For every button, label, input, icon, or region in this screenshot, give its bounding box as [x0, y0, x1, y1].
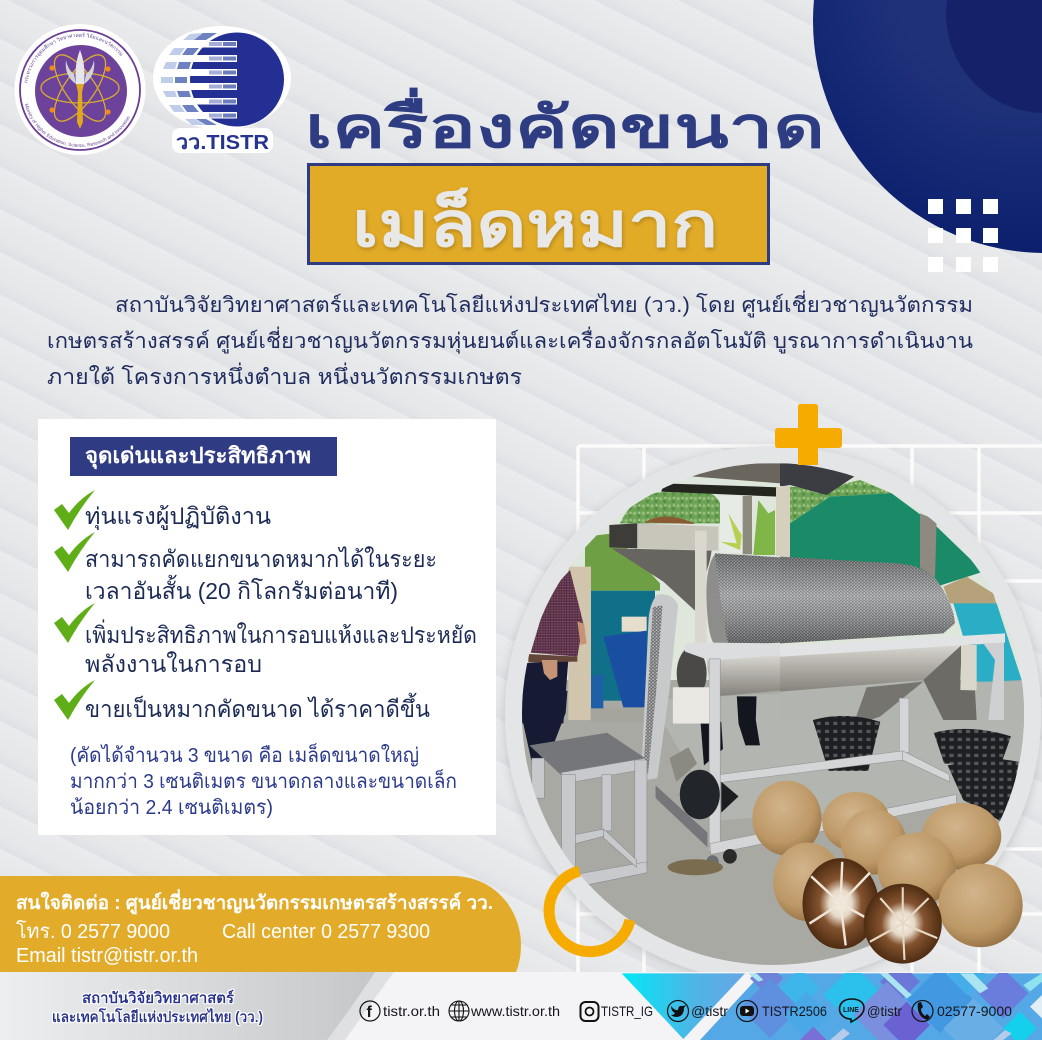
tree trunk [920, 513, 937, 577]
panel: contact [0, 876, 521, 972]
lower chute [855, 682, 923, 720]
facebook: f [366, 1004, 372, 1021]
floor right [780, 682, 992, 693]
benefit list: พลังงานในการอบ [85, 651, 262, 677]
panel: contact: โทร. 0 2577 9000 [16, 920, 170, 943]
trough right [780, 645, 962, 692]
intro paragraph [47, 290, 973, 389]
instagram [580, 1002, 653, 1021]
drum end [706, 554, 730, 645]
frame corner [685, 643, 780, 661]
panel: contact: สนใจติดต่อ : ศูนย์เชี่ยวชาญนวัตกรรมเกษตรสร้างสรรค์ วว. [16, 889, 493, 915]
pale support [961, 645, 977, 690]
photo: upper right scene [780, 463, 1040, 720]
building and pole [720, 496, 775, 555]
benefit list [85, 503, 477, 722]
size note: มากกว่า 3 เซนติเมตร ขนาดกลางและขนาดเล็ก [70, 768, 457, 793]
subtitle banner: เมล็ดหมาก: เมล็ดหมาก [352, 187, 718, 260]
photo ring [505, 446, 1041, 982]
teal wall [585, 591, 655, 710]
line: @tistr [867, 1003, 902, 1019]
trough left [707, 655, 780, 696]
icon: yellow open ring [549, 871, 630, 952]
social links [360, 999, 1012, 1022]
silver frame lower [709, 659, 956, 854]
phone [912, 1000, 1012, 1022]
icons: green check marks [54, 490, 95, 720]
goods on shelf [943, 577, 997, 605]
discharge chute [923, 645, 977, 720]
panel: contact: Call center 0 2577 9300 [222, 921, 430, 943]
panel: contact: Email tistr@tistr.or.th [16, 945, 198, 967]
cut nut right [864, 884, 942, 964]
benefit list: สามารถคัดแยกขนาดหมากได้ในระยะ [85, 546, 437, 572]
panel: highlights and efficiency [38, 419, 496, 835]
lower foliage [585, 533, 660, 591]
logo: ministry seal: กระทรวงการอุดมศึกษา วิทยาศาสตร์ วิจัยและนวัตกรรม [24, 32, 123, 83]
panel heading: จุดเด่นและประสิทธิภาพ [85, 443, 311, 470]
size note: น้อยกว่า 2.4 เซนติเมตร) [70, 797, 273, 819]
footer organisation name: และเทคโนโลยีแห่งประเทศไทย (วว.) [52, 1007, 263, 1026]
teal wall right [953, 603, 1022, 683]
benefit list: ทุ่นแรงผู้ปฏิบัติงาน [85, 503, 271, 530]
cut nut left [802, 858, 879, 949]
facebook [360, 1001, 440, 1021]
sky trees [789, 480, 892, 523]
benefit list: เวลาอันสั้น (20 กิโลกรัมต่อนาที) [85, 575, 398, 604]
intro paragraph: เกษตรสร้างสรรค์ ศูนย์เชี่ยวชาญนวัตกรรมหุ่นยนต์และเครื่องจักรกลอัตโนมัติ บูรณาการดำเนินงาน [47, 326, 973, 354]
youtube: TISTR2506 [762, 1003, 827, 1019]
intro paragraph: สถาบันวิจัยวิทยาศาสตร์และเทคโนโลยีแห่งประเทศไทย (วว.) โดย ศูนย์เชี่ยวชาญนวัตกรรม [115, 290, 973, 318]
concrete floor strip [590, 708, 604, 720]
decorative navy circles top right [813, 0, 1042, 253]
roof [661, 463, 781, 556]
twitter [668, 1000, 728, 1022]
logo: ministry seal [14, 24, 146, 155]
photo: areca nut sorting machine [522, 463, 1024, 965]
perforated drum left [715, 553, 780, 645]
logo: ministry seal: Ministry of Higher Education, Science, Research and Innovation [24, 104, 130, 148]
decorative white grid behind photo [578, 446, 1042, 975]
logo: TISTR [153, 26, 291, 154]
wheel hub [676, 650, 707, 688]
instagram: TISTR_IG [601, 1003, 653, 1019]
logo: TISTR: วว.TISTR [176, 132, 270, 154]
trees [620, 492, 725, 523]
roof [780, 463, 857, 495]
phone: 02577-9000 [937, 1003, 1012, 1019]
size note [70, 742, 457, 819]
step stool [529, 733, 647, 885]
icon: white dot grid [928, 199, 998, 272]
intro paragraph: ภายใต้ โครงการหนึ่งตำบล หนึ่งนวัตกรรมเกษตร [47, 362, 522, 389]
benefit list: ขายเป็นหมากคัดขนาด ได้ราคาดีขึ้น [85, 693, 430, 722]
post [780, 486, 790, 558]
frame right leg [983, 643, 1004, 720]
perforated drum right [780, 557, 955, 643]
youtube [736, 1000, 827, 1022]
website [449, 1001, 560, 1021]
photo: lower scene [522, 594, 1019, 885]
pillar [568, 567, 591, 720]
hopper [609, 517, 718, 646]
footer organisation name: สถาบันวิจัยวิทยาศาสตร์ [82, 989, 235, 1007]
worker legs behind machine [701, 696, 760, 765]
green tarp [790, 493, 983, 587]
panel heading [70, 437, 337, 476]
facebook: tistr.or.th [383, 1003, 440, 1019]
footer organisation name [52, 989, 263, 1026]
person [522, 570, 587, 723]
control box [673, 687, 709, 724]
line [840, 999, 902, 1022]
title: เครื่องคัดขนาด: เครื่องคัดขนาด [305, 87, 825, 160]
icon: yellow plus [775, 404, 842, 465]
line: LINE [843, 1007, 859, 1014]
baskets [813, 716, 1019, 825]
twitter: @tistr [691, 1003, 728, 1019]
oil stain on floor [668, 859, 723, 875]
inner leg [910, 698, 911, 720]
photo: upper left scene [522, 463, 781, 723]
benefit list: เพิ่มประสิทธิภาพในการอบแห้งและประหยัด [85, 619, 477, 648]
footer band [0, 955, 1042, 1040]
size note: (คัดได้จำนวน 3 ขนาด คือ เมล็ดขนาดใหญ่ [70, 742, 419, 767]
areca nuts [752, 781, 1023, 964]
subtitle banner: เมล็ดหมาก [308, 164, 768, 264]
motor [656, 747, 739, 868]
footer pattern: blue diamonds [622, 955, 1042, 1040]
person's legs [522, 691, 567, 767]
photo backdrop and floor [522, 476, 1024, 965]
belt guard [642, 594, 678, 780]
website: www.tistr.or.th [470, 1003, 560, 1019]
frame bar [780, 633, 1005, 657]
